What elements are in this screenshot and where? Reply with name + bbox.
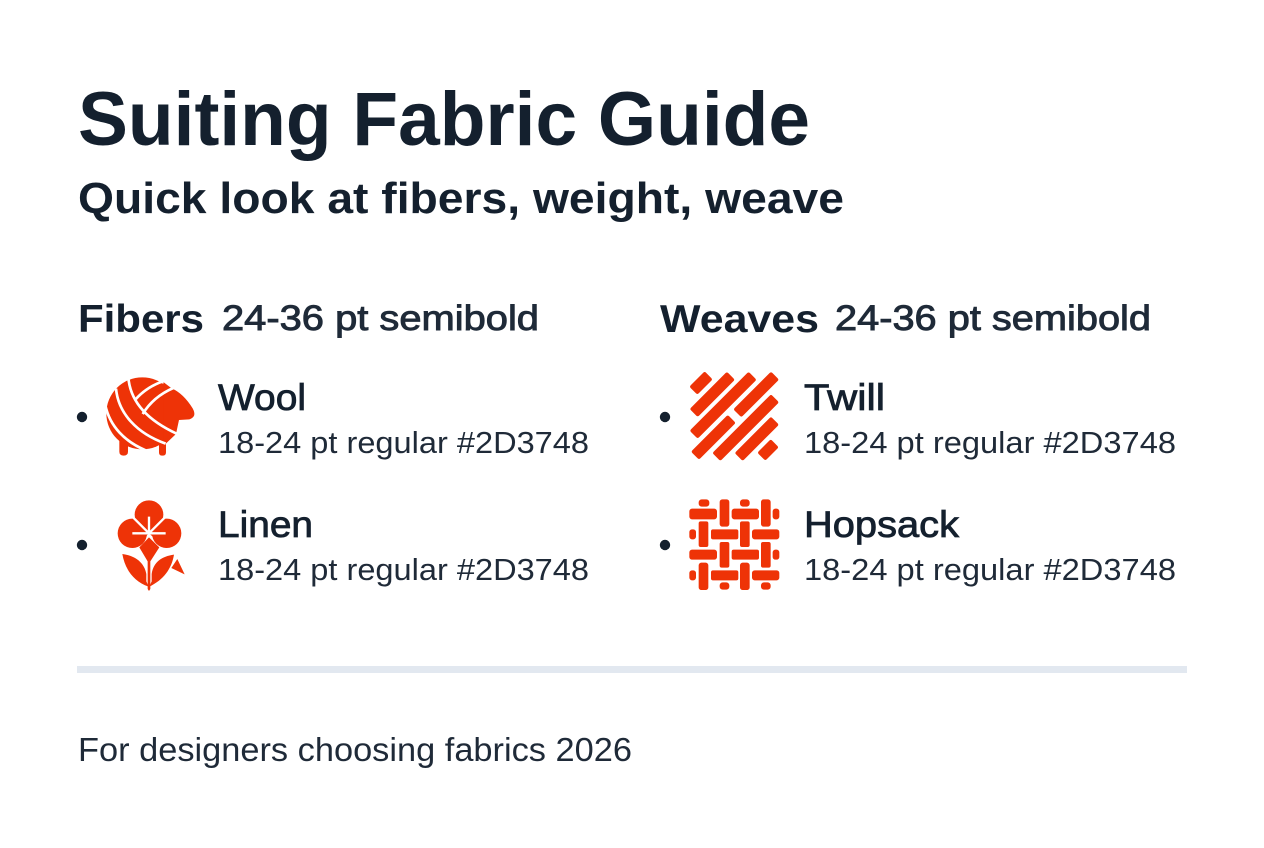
subtitle: Quick look at fibers, weight, weave <box>78 174 844 223</box>
label: hopsack: Hopsack <box>804 504 960 545</box>
footer: For designers choosing fabrics 2026 <box>78 731 632 768</box>
detail: hopsack: 18-24 pt regular #2D3748 <box>804 552 1176 587</box>
heading note: fibers: 24-36 pt semibold <box>222 299 539 338</box>
label: twill: Twill <box>804 377 885 418</box>
bullet: wool <box>77 412 87 422</box>
bullet: twill <box>660 412 670 422</box>
bullet: hopsack <box>660 540 670 550</box>
heading note: weaves: 24-36 pt semibold <box>835 299 1151 338</box>
label: linen: Linen <box>218 504 313 545</box>
title: Suiting Fabric Guide <box>78 77 810 162</box>
panel: weaves <box>660 298 1176 590</box>
heading: weaves: Weaves <box>660 298 819 341</box>
icon: twill weave <box>689 371 779 461</box>
detail: wool: 18-24 pt regular #2D3748 <box>218 425 589 460</box>
detail: twill: 18-24 pt regular #2D3748 <box>804 425 1176 460</box>
icon: hopsack weave <box>690 500 779 590</box>
icon: wool sheep <box>105 377 194 456</box>
label: wool: Wool <box>218 377 306 418</box>
bullet: linen <box>77 540 87 550</box>
panel: fibers <box>77 298 589 591</box>
heading: fibers: Fibers <box>78 298 204 341</box>
icon: linen flower <box>118 500 185 591</box>
detail: linen: 18-24 pt regular #2D3748 <box>218 552 589 587</box>
